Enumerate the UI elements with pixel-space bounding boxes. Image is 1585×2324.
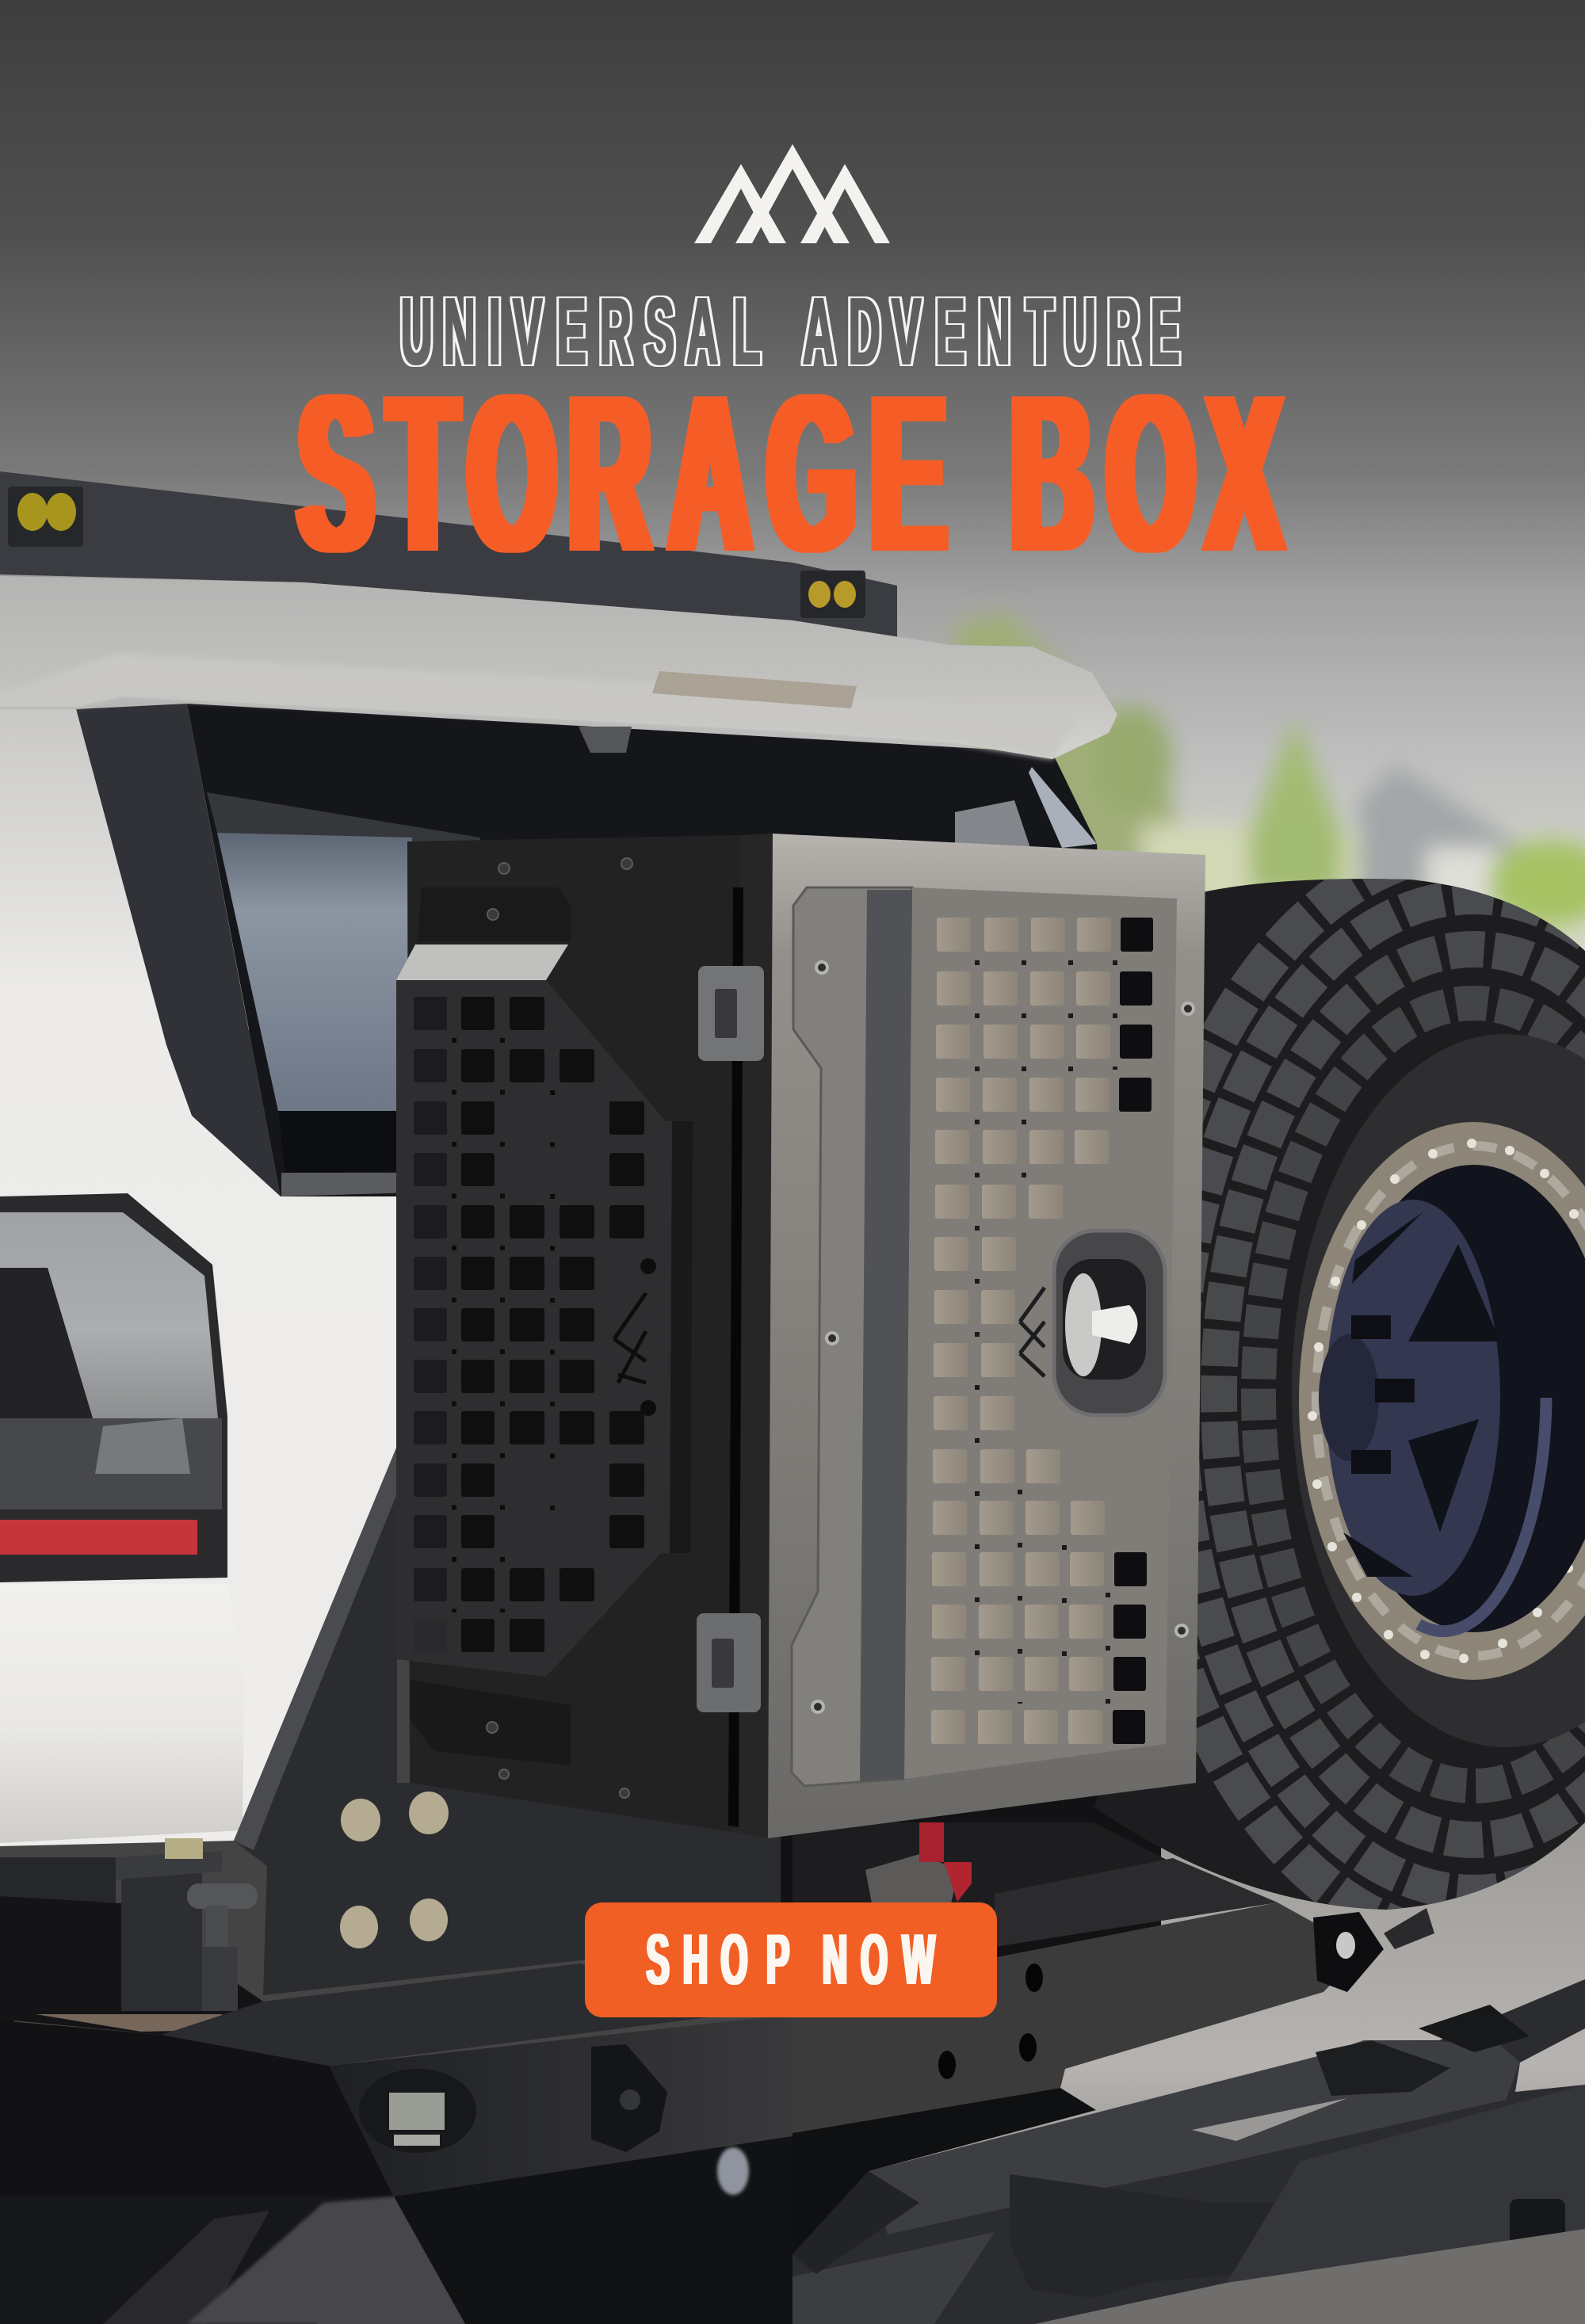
- bumper front face: [329, 2014, 794, 2196]
- plate round holes: [640, 1258, 656, 1416]
- rim rivets: [1308, 1139, 1579, 1663]
- tire sidewall: [1292, 1034, 1585, 1747]
- door latch: [1054, 1231, 1165, 1415]
- left plate mounting dots: [454, 1038, 552, 1612]
- door seam: [728, 887, 743, 1827]
- subtitle: UNIVERSAL ADVENTURE: UNIVERSAL ADVENTURE: [400, 278, 1180, 384]
- logo mark on door: [1020, 1288, 1045, 1376]
- hitch cargo rack: [792, 1979, 1585, 2324]
- screws on door: [812, 962, 1194, 1712]
- distant trees and house: [951, 610, 1585, 951]
- call to action button: SHOP NOW: [585, 1902, 997, 2017]
- mesh panel on door: [904, 887, 1177, 1779]
- wheel hub: [1319, 1334, 1379, 1461]
- hinge post: [36, 1838, 258, 2032]
- shadow gap under the box: [781, 1775, 1161, 1965]
- box corner edge: [731, 834, 773, 1838]
- black molle plate: [396, 980, 672, 1677]
- plate side flange: [670, 1121, 693, 1553]
- spare tire: [1094, 848, 1585, 1941]
- wheel barrel: [1335, 1165, 1585, 1632]
- rear window: [187, 704, 1110, 1196]
- wheel rim: [1299, 1122, 1585, 1680]
- left rack light: [8, 487, 83, 547]
- tail light: [0, 1193, 227, 1582]
- bumper left corner: [0, 1857, 394, 2196]
- wheel face: [1326, 1200, 1500, 1596]
- bumper gauge: [359, 2069, 476, 2153]
- tread blocks: [1197, 879, 1407, 1910]
- left plate cut-outs: [461, 997, 644, 1652]
- logo mark on plate: [614, 1293, 646, 1383]
- window pillar: [76, 704, 281, 1196]
- dark under beam: [792, 2088, 1096, 2254]
- tire carrier plate: [234, 1446, 781, 1995]
- right mesh dark cut-outs: [1113, 918, 1153, 1744]
- bottom bracket plate: [410, 1680, 571, 1765]
- top bracket plate: [418, 887, 571, 941]
- right mesh mounting dots: [977, 960, 1115, 1704]
- bumper top face: [162, 1963, 708, 2066]
- title: STORAGE BOX: STORAGE BOX: [298, 348, 1281, 599]
- box right face: [768, 834, 1205, 1838]
- carrier bolts: [340, 1792, 449, 1948]
- left face screws: [487, 858, 632, 1798]
- brand logo: three mountain peaks: [694, 144, 890, 243]
- right rack light: [800, 571, 865, 618]
- left plate cut-outs: outer column: [414, 997, 447, 1652]
- spoiler: [0, 576, 1117, 759]
- area below bumper: [0, 2136, 872, 2324]
- call to action button: SHOP NOW: SHOP NOW: [647, 1919, 935, 2000]
- dark strip: [860, 890, 912, 1781]
- box left face: [407, 835, 740, 1832]
- lower body panel: [0, 1585, 244, 1843]
- bumper recovery point: [591, 2044, 667, 2152]
- roof rack bar: [0, 471, 897, 637]
- red clamp: [865, 1822, 972, 1903]
- black molle plate flange: [396, 944, 568, 980]
- ground behind the vehicle: [792, 1807, 1585, 2324]
- ground bottom right: [1035, 2229, 1585, 2324]
- right mesh cut-outs: [931, 918, 1111, 1744]
- carrier plate bevel: [234, 1446, 397, 1850]
- lower hinge: [697, 1613, 761, 1712]
- sky: [0, 0, 1585, 1030]
- storage box product: [396, 834, 1205, 1838]
- white car body: [0, 709, 404, 1846]
- door bracket plate: [792, 887, 912, 1786]
- beam end knob: [1313, 1908, 1434, 1992]
- upper hinge: [698, 966, 764, 1061]
- main bumper beam: [792, 1822, 1363, 2133]
